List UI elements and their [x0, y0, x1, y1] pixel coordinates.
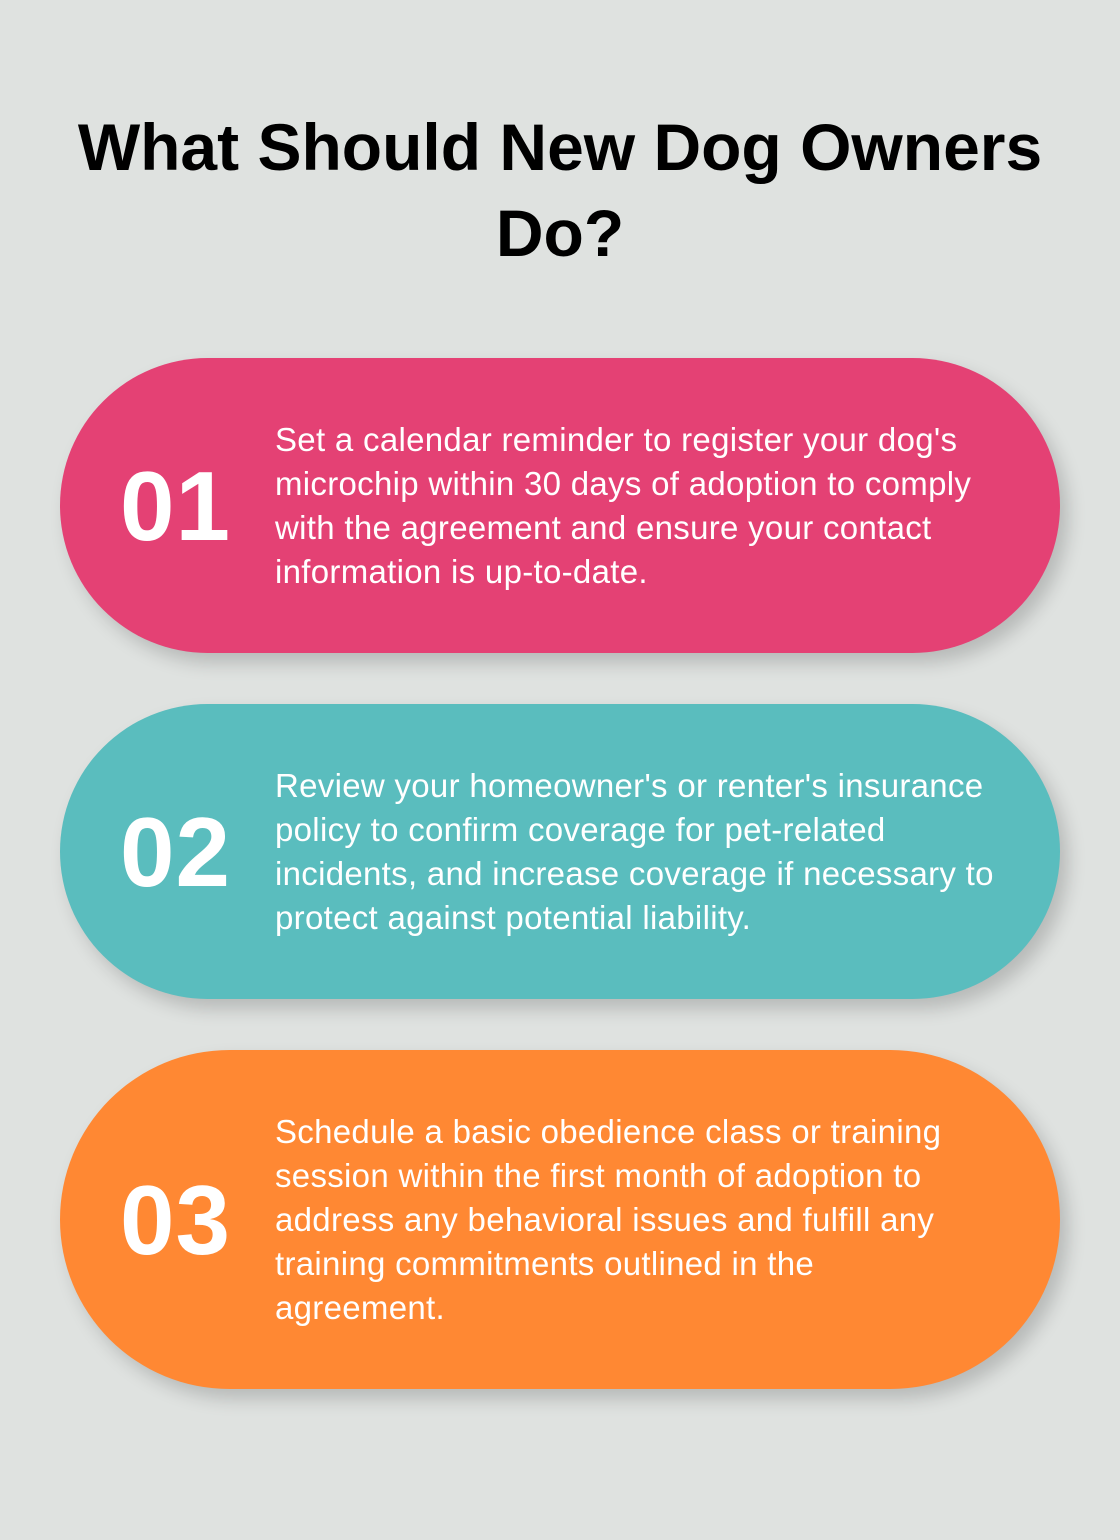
text 03: training commitments outlined in the	[275, 1245, 814, 1282]
panel: step 02	[60, 704, 1060, 999]
text 03	[275, 1113, 941, 1326]
text 02	[275, 767, 994, 936]
number 03: 03	[120, 1165, 231, 1275]
title	[78, 110, 1042, 270]
text 01: microchip within 30 days of adoption to comply	[275, 465, 971, 502]
text 01	[275, 421, 971, 590]
panel: step 03	[60, 1050, 1060, 1389]
text 01: with the agreement and ensure your contact	[275, 509, 932, 546]
text 02: Review your homeowner's or renter's insurance	[275, 767, 983, 804]
number 02: 02	[120, 797, 231, 907]
text 03: address any behavioral issues and fulfill any	[275, 1201, 934, 1238]
text 02: incidents, and increase coverage if necessary to	[275, 855, 994, 892]
number 01: 01	[120, 451, 231, 561]
text 02: protect against potential liability.	[275, 899, 751, 936]
text 03: Schedule a basic obedience class or training	[275, 1113, 941, 1150]
text 02: policy to confirm coverage for pet-related	[275, 811, 886, 848]
text 03: session within the first month of adoption to	[275, 1157, 921, 1194]
title: Do?	[496, 196, 624, 270]
text 01: Set a calendar reminder to register your dog's	[275, 421, 957, 458]
panel: step 01	[60, 358, 1060, 653]
text 03: agreement.	[275, 1289, 445, 1326]
title: What Should New Dog Owners	[78, 110, 1042, 184]
text 01: information is up-to-date.	[275, 553, 648, 590]
